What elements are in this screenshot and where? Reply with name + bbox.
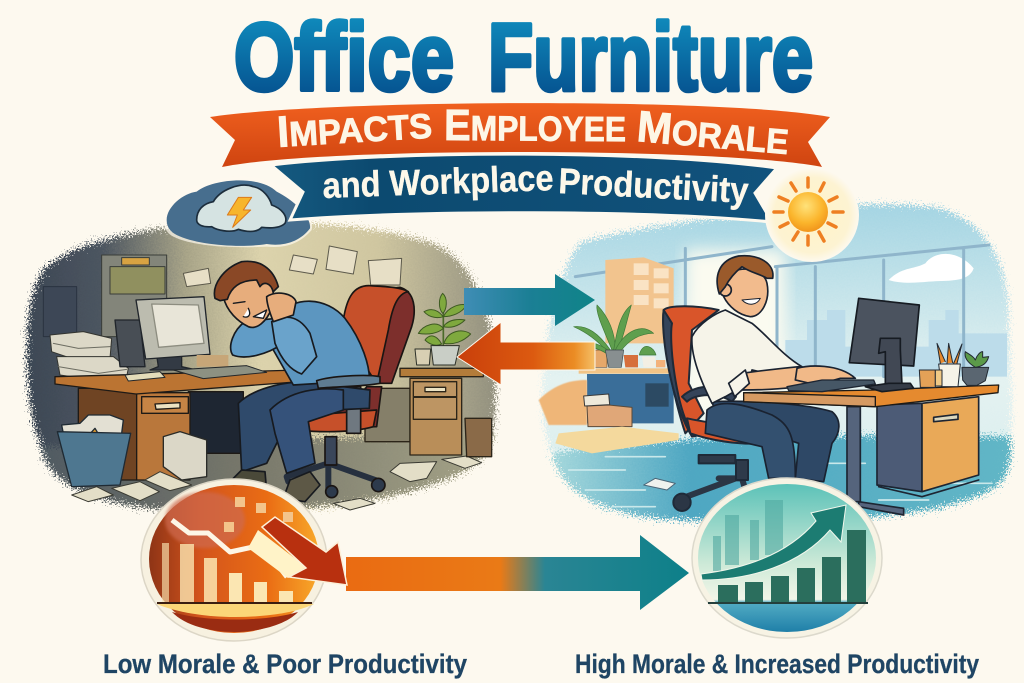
down arrow	[262, 517, 347, 585]
white trend line	[172, 520, 287, 577]
city skyline	[785, 310, 1007, 377]
potted plant	[415, 293, 471, 365]
old monitor	[115, 297, 210, 370]
word furniture: Furniture	[488, 4, 813, 111]
outer halo	[163, 177, 312, 247]
near leg	[705, 404, 795, 478]
banner text	[322, 157, 749, 211]
window frames	[575, 245, 989, 377]
face details	[233, 302, 267, 318]
cream arrow wedge	[248, 530, 306, 578]
trousers	[238, 382, 370, 472]
upward arrow	[701, 505, 846, 580]
desk supplies	[919, 343, 989, 387]
floor	[552, 436, 1011, 521]
scene backdrop wall	[27, 222, 496, 513]
scene backdrop sky	[543, 204, 1012, 521]
floor zone left	[555, 427, 679, 453]
hair	[717, 256, 773, 294]
sun rays	[774, 178, 843, 245]
sleeve cuff	[729, 370, 749, 397]
word office: Office	[234, 4, 454, 111]
floor highlights	[569, 457, 992, 507]
dark cloud	[167, 180, 310, 246]
paper bag	[163, 432, 207, 480]
far arm	[231, 318, 283, 357]
plant	[574, 305, 656, 367]
badge ring	[141, 479, 327, 641]
faded background bars	[713, 500, 783, 571]
icon: sun	[765, 168, 859, 262]
stressed man	[214, 261, 370, 502]
modern monitor	[849, 298, 919, 392]
head	[720, 269, 768, 317]
dark lower arc	[172, 612, 298, 632]
happy man	[692, 256, 855, 482]
clouds in window	[889, 254, 974, 283]
sweater torso	[273, 301, 369, 385]
side desk and cabinet	[365, 368, 492, 457]
ribbon text	[276, 99, 791, 164]
forearm	[742, 367, 819, 390]
ergonomic chair	[663, 306, 802, 511]
badge ring	[692, 478, 882, 638]
keyboard	[787, 380, 875, 392]
pale block highlights	[224, 497, 293, 532]
office chair	[267, 286, 414, 498]
pink upper glow	[165, 492, 245, 548]
light cloud	[197, 185, 286, 231]
hand on neck	[267, 293, 296, 322]
blue banner	[271, 154, 777, 222]
shirt	[692, 310, 802, 403]
trousers	[712, 401, 839, 482]
arrow: low to high transition	[346, 535, 689, 610]
warm lower band	[157, 604, 314, 617]
ribbon shape	[210, 103, 830, 167]
panel: happy employee scene	[539, 204, 1012, 521]
shelf with items	[539, 350, 674, 427]
arrow: blue to teal	[464, 274, 595, 326]
desk	[55, 370, 300, 480]
near leg	[270, 389, 343, 473]
peach cabinet	[605, 257, 674, 343]
sun disc	[788, 192, 828, 232]
floor	[40, 433, 493, 512]
panel: high productivity chart badge	[692, 478, 882, 638]
hair	[214, 261, 278, 301]
floor papers	[72, 456, 482, 510]
lightning bolt	[227, 197, 252, 227]
badge fill	[698, 484, 876, 632]
keyboard and papers	[125, 366, 267, 381]
paper stacks	[50, 332, 128, 381]
floor paper	[644, 478, 675, 490]
head	[223, 273, 274, 327]
panel: stressed employee scene	[27, 222, 496, 513]
panel: low productivity chart badge	[141, 479, 347, 641]
window glow	[685, 250, 785, 417]
smile	[742, 298, 760, 304]
icon: storm cloud	[163, 177, 312, 247]
wall papers	[183, 246, 402, 287]
banner shape	[271, 154, 777, 222]
word productivity: Productivity	[558, 160, 749, 211]
orange ribbon	[210, 99, 830, 167]
ear	[719, 284, 731, 296]
word employee: EMPLOYEE	[444, 101, 626, 151]
hands	[795, 366, 855, 385]
desk cabinet	[877, 397, 979, 497]
sun glow	[765, 168, 859, 262]
desk leg	[847, 407, 904, 515]
dark shelving	[43, 287, 77, 337]
word impacts: IMPACTS	[276, 99, 433, 157]
label: low morale: Low Morale & Poor Productivity	[103, 649, 467, 679]
title	[234, 4, 813, 111]
words and workplace: and Workplace	[322, 157, 554, 206]
armrest	[317, 375, 380, 388]
filing cabinet	[102, 255, 167, 337]
growth bars	[718, 530, 866, 603]
near arm	[272, 317, 317, 374]
badge fill	[149, 485, 319, 633]
waste bin	[57, 415, 131, 487]
chart baseline	[157, 602, 312, 604]
declining bars	[162, 543, 293, 603]
box on desk	[197, 355, 228, 367]
shoes	[233, 470, 266, 485]
word morale: MORALE	[635, 102, 791, 164]
desk top	[744, 385, 999, 407]
arrow: orange pointing left	[457, 322, 595, 385]
chart baseline	[708, 602, 868, 604]
